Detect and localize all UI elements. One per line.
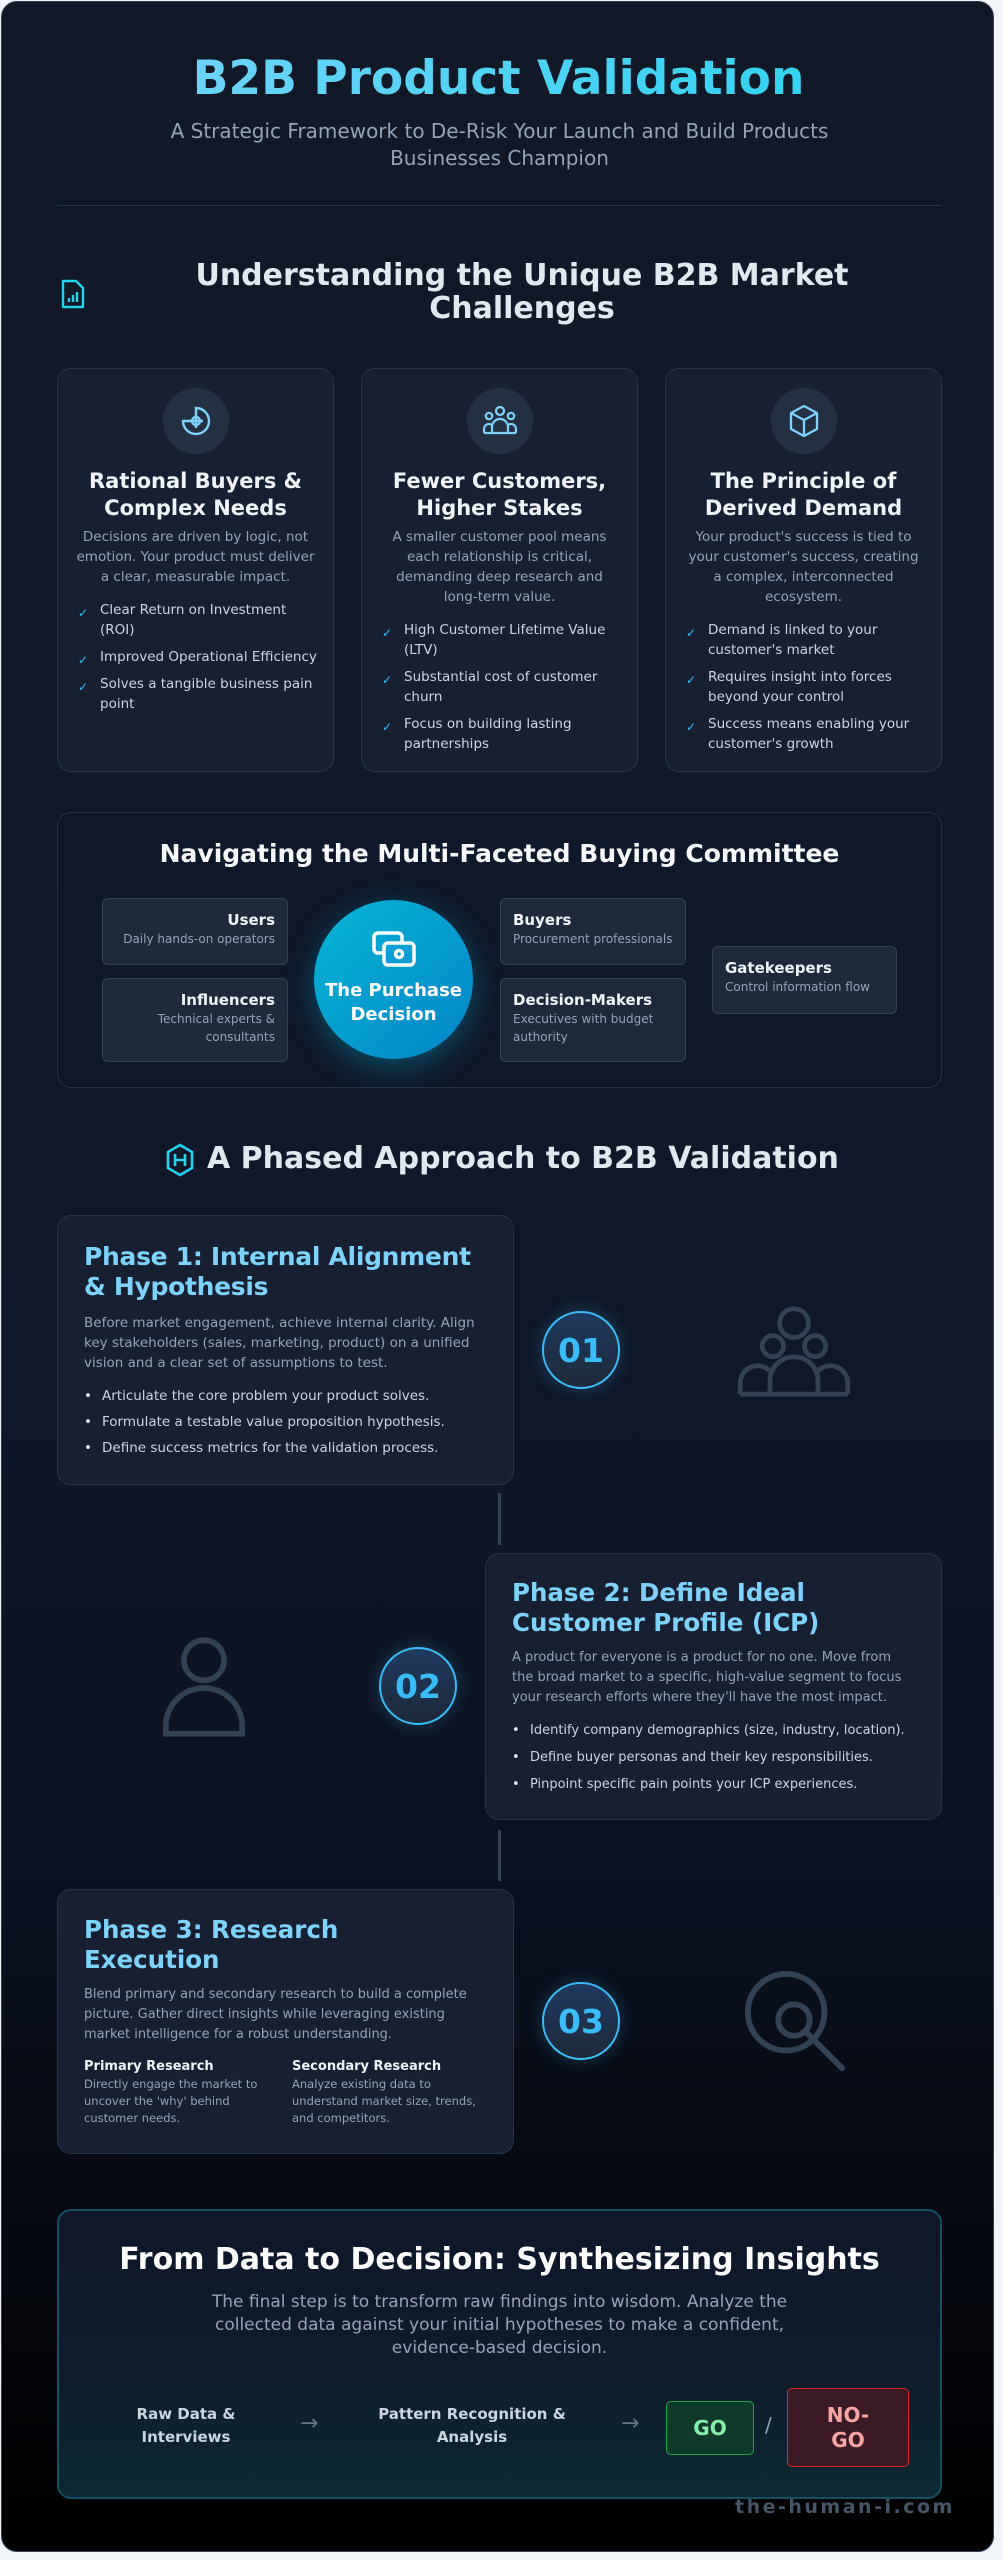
no-go badge: GO xyxy=(831,2428,865,2452)
card: derived demand: Demand is linked to your customer's market xyxy=(708,622,877,658)
card: fewer customers: Focus on building lasting partnerships xyxy=(404,716,572,752)
card: rational buyers: Rational Buyers & xyxy=(89,469,302,493)
number 02: 02 xyxy=(395,1666,441,1706)
phase 2 card: Define buyer personas and their key responsibilities. xyxy=(530,1750,873,1765)
card: derived demand: Derived Demand xyxy=(705,496,902,520)
role: buyers: Buyers xyxy=(513,911,571,929)
flow: Pattern Recognition & Analysis xyxy=(378,2405,566,2446)
flow: Raw Data & Interviews xyxy=(137,2405,235,2446)
panel: buying committee xyxy=(57,812,942,1088)
phase 2 card: A product for everyone is a product for no one. Move from the broad market to a specific, high-value segment to focus your research efforts where they'll have the most impact. xyxy=(512,1650,901,1705)
go badge: GO xyxy=(693,2416,727,2440)
phase 3 card xyxy=(57,1889,514,2154)
research types: Primary Research xyxy=(84,2059,214,2074)
phase 1 card xyxy=(57,1215,514,1485)
no-go badge: NO- xyxy=(827,2403,869,2427)
title xyxy=(2,49,995,109)
heading: From Data to Decision: Synthesizing Insights xyxy=(119,2242,880,2277)
role: users xyxy=(102,898,288,965)
icon: document chart xyxy=(62,280,84,308)
card: rational buyers: Complex Needs xyxy=(104,496,287,520)
phase 1 card: Define success metrics for the validation process. xyxy=(102,1440,438,1456)
research types xyxy=(84,2059,476,2125)
role: buyers xyxy=(500,898,686,965)
role: decision-makers: Decision-Makers xyxy=(513,991,652,1009)
card: rational buyers xyxy=(57,368,334,772)
role: gatekeepers: Gatekeepers xyxy=(725,959,832,977)
number 01: 01 xyxy=(558,1330,604,1370)
title: B2B Product Validation xyxy=(193,51,804,106)
panel: synthesis xyxy=(57,2209,942,2499)
card: rational buyers: Improved Operational Efficiency xyxy=(100,649,317,665)
phase 2 card: Pinpoint specific pain points your ICP experiences. xyxy=(530,1777,857,1792)
phase 1 card: Formulate a testable value proposition hypothesis. xyxy=(102,1414,445,1430)
arrow: → xyxy=(621,2411,639,2436)
center: purchase decision: The Purchase xyxy=(325,980,462,1001)
number 03: 03 xyxy=(558,2002,604,2040)
phase 2 card: Phase 2: Define Ideal Customer Profile (ICP) xyxy=(512,1578,819,1637)
card: rational buyers: Decisions are driven by logic, not emotion. Your product must deliver a clear, measurable impact. xyxy=(76,529,315,585)
card: derived demand: Requires insight into forces beyond your control xyxy=(708,669,892,705)
card: fewer customers: A smaller customer pool means each relationship is critical, demanding deep research and long-term value. xyxy=(393,529,606,605)
icon: person xyxy=(163,1637,245,1737)
footer brand: the-human-i.com xyxy=(735,2496,955,2518)
go badge xyxy=(666,2401,754,2455)
card: derived demand xyxy=(665,368,942,772)
card: rational buyers: Solves a tangible business pain point xyxy=(100,676,312,712)
section heading: phased approach: A Phased Approach to B2B Validation xyxy=(207,1141,839,1176)
phase 3 card: Phase 3: Research xyxy=(84,1915,338,1944)
card: derived demand: Your product's success is tied to your customer's success, creating a complex, interconnected ecosystem. xyxy=(688,529,919,605)
number 02 xyxy=(379,1647,457,1725)
icon: magnifier xyxy=(745,1971,846,2071)
phase 3 card: Execution xyxy=(84,1945,220,1974)
icon: hub xyxy=(166,1144,194,1176)
role: influencers: Influencers xyxy=(181,991,275,1009)
description: The final step is to transform raw findings into wisdom. Analyze the collected data against your initial hypotheses to make a confident, evidence-based decision. xyxy=(212,2292,787,2358)
phase 3 card: Blend primary and secondary research to build a complete picture. Gather direct insights while leveraging existing market intelligence for a robust understanding. xyxy=(84,1987,467,2042)
role: users: Users xyxy=(227,911,275,929)
card: rational buyers: Clear Return on Investment (ROI) xyxy=(100,602,286,638)
card: fewer customers xyxy=(361,368,638,772)
research types: Directly engage the market to uncover the 'why' behind customer needs. xyxy=(84,2077,257,2125)
phase 1 card: Phase 1: Internal Alignment & Hypothesis xyxy=(84,1242,471,1301)
flow xyxy=(137,2388,909,2467)
icon: people xyxy=(738,1306,850,1396)
card: derived demand: The Principle of xyxy=(711,469,896,493)
role: influencers: Technical experts & consultants xyxy=(158,1012,275,1044)
phase 1 card: Before market engagement, achieve internal clarity. Align key stakeholders (sales, marketing, product) on a unified vision and a clear set of assumptions to test. xyxy=(84,1315,475,1371)
role: influencers xyxy=(102,978,288,1062)
subtitle: A Strategic Framework to De-Risk Your Launch and Build Products Businesses Champion xyxy=(171,119,828,170)
role: decision-makers: Executives with budget authority xyxy=(513,1012,653,1044)
icon: target xyxy=(163,388,229,454)
heading: Navigating the Multi-Faceted Buying Committee xyxy=(160,839,839,868)
card: fewer customers: High Customer Lifetime Value (LTV) xyxy=(404,622,605,658)
number 03 xyxy=(542,1982,620,2060)
phase 2 card xyxy=(485,1553,942,1820)
number 01 xyxy=(542,1311,620,1389)
phase 2 card: Identify company demographics (size, industry, location). xyxy=(530,1723,905,1738)
role: gatekeepers: Control information flow xyxy=(725,980,870,994)
card: derived demand: Success means enabling your customer's growth xyxy=(708,716,909,752)
phase 1 card: Articulate the core problem your product solves. xyxy=(102,1388,429,1404)
section heading: market challenges: Understanding the Unique B2B Market Challenges xyxy=(195,258,849,326)
role: users: Daily hands-on operators xyxy=(123,932,275,946)
card: fewer customers: Substantial cost of customer churn xyxy=(404,669,597,705)
role: buyers: Procurement professionals xyxy=(513,932,672,946)
icon: group xyxy=(467,388,533,454)
role: gatekeepers xyxy=(712,946,897,1014)
no-go badge xyxy=(787,2388,909,2467)
center: purchase decision xyxy=(314,900,473,1059)
research types: Secondary Research xyxy=(292,2059,441,2074)
role: decision-makers xyxy=(500,978,686,1062)
flow: / xyxy=(765,2413,772,2437)
center: purchase decision: Decision xyxy=(350,1004,437,1025)
card: fewer customers: Higher Stakes xyxy=(416,496,583,520)
arrow: → xyxy=(300,2411,318,2436)
research types: Analyze existing data to understand market size, trends, and competitors. xyxy=(292,2077,476,2125)
card: fewer customers: Fewer Customers, xyxy=(393,469,606,493)
icon: cube xyxy=(771,388,837,454)
